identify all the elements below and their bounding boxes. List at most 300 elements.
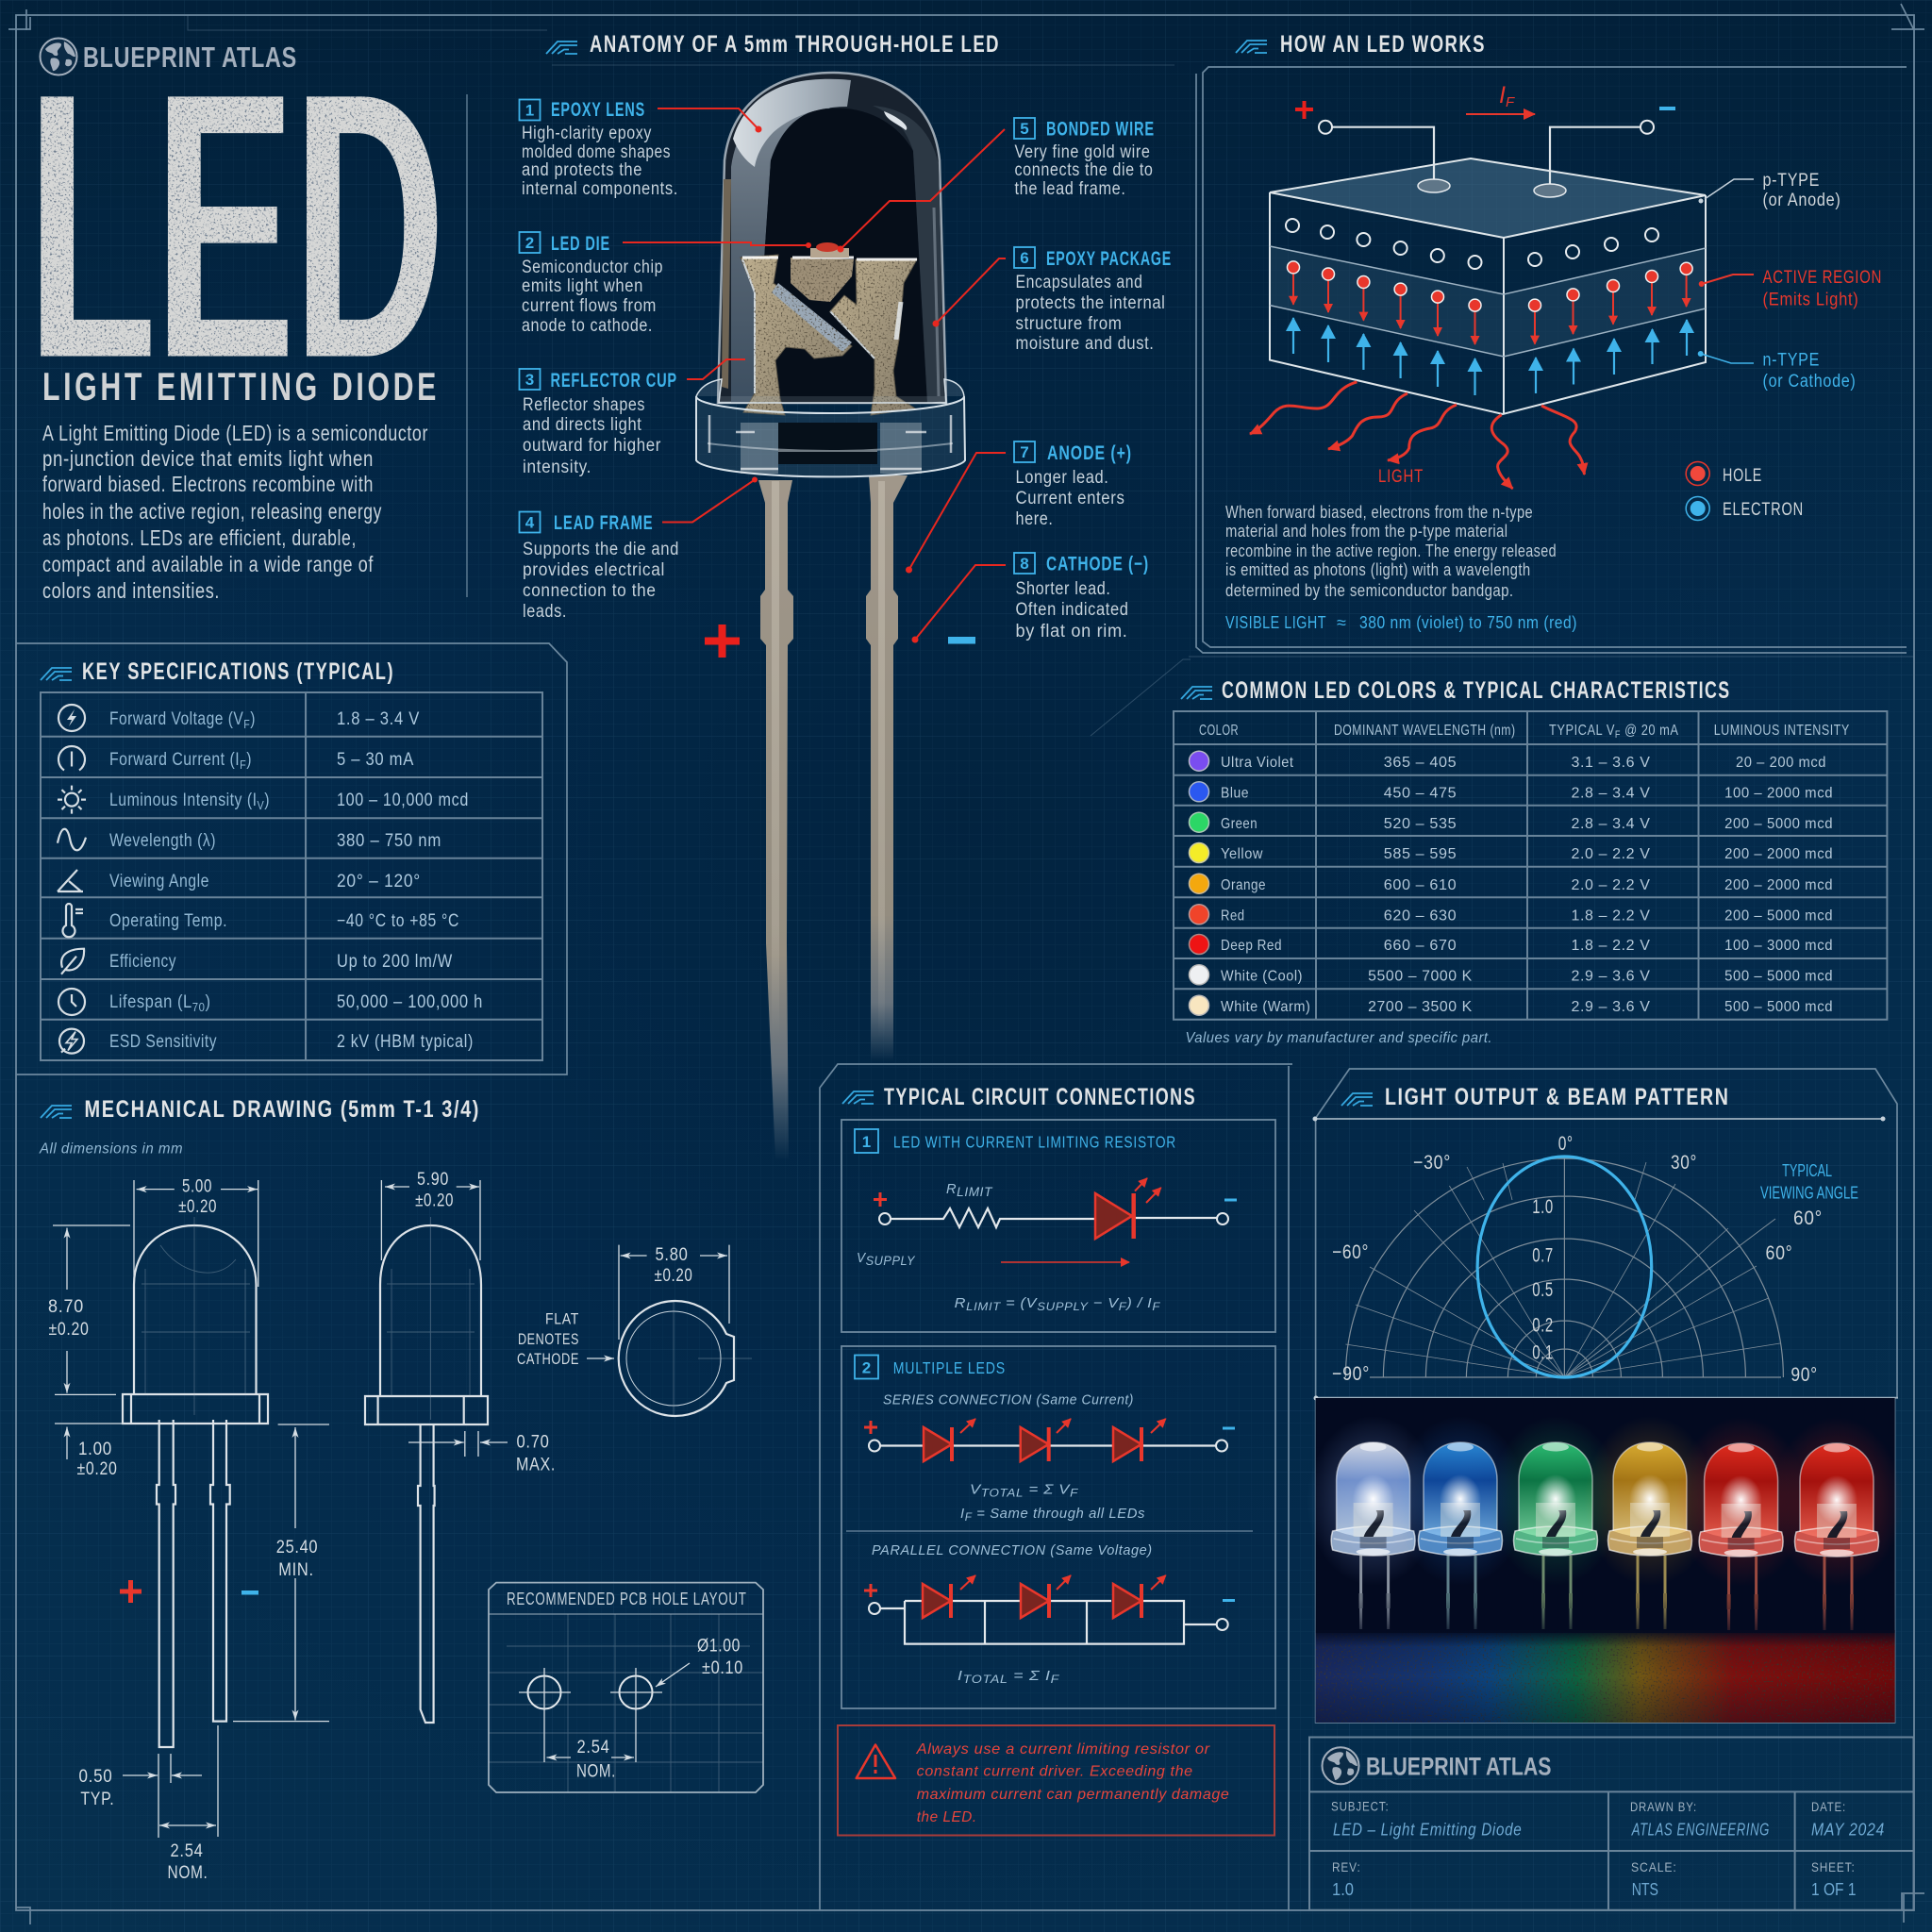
dimension: lead 0.70	[408, 1431, 556, 1475]
field: revision: 1.0	[1332, 1880, 1354, 1899]
heading: anatomy	[546, 31, 1000, 58]
callout 2: LED die: 2	[525, 234, 534, 252]
row: efficiency	[61, 949, 453, 974]
spec table grid	[41, 692, 542, 1060]
row: white warm: 2700 – 3500 K	[1368, 999, 1473, 1015]
polar labels: 90°	[1790, 1364, 1818, 1386]
dimension: width 5.00	[134, 1177, 258, 1287]
callout 4: lead frame: LEAD FRAME	[554, 512, 653, 534]
blue electron arrows	[1293, 318, 1687, 395]
callout 4: lead frame: provides electrical	[523, 560, 665, 580]
table header: LUMINOUS INTENSITY	[1714, 723, 1850, 739]
dimension: flange 1.00	[55, 1424, 123, 1479]
field: date	[1811, 1799, 1885, 1840]
semiconductor block	[1269, 158, 1706, 414]
dimension: lead length 25.40	[233, 1424, 329, 1722]
sub-panel 2: multiple LEDs: I	[960, 1506, 965, 1522]
callout 7: anode: Current enters	[1015, 489, 1124, 508]
row: wavelength: 380 – 750 nm	[337, 831, 441, 851]
row: lifespan: 70	[192, 1000, 205, 1014]
bottom view	[619, 1245, 752, 1416]
row: forward current: F	[240, 758, 246, 772]
LED: blue	[1394, 1416, 1526, 1629]
row: red	[1189, 905, 1833, 924]
callout 3: reflector cup: intensity.	[523, 458, 591, 477]
flat denotes cathode note	[517, 1310, 614, 1368]
callout 5: bonded wire: the lead frame.	[1015, 179, 1126, 199]
field: scale: SCALE:	[1631, 1859, 1677, 1874]
LED: red	[1675, 1417, 1807, 1630]
callout 3: reflector cup: 3	[525, 371, 534, 389]
dimension: height 8.70: ±0.20	[49, 1320, 89, 1340]
table header	[1199, 723, 1850, 741]
row: forward current	[58, 746, 414, 772]
terminals and contacts	[1295, 101, 1675, 197]
callout 1: epoxy lens	[519, 99, 762, 199]
intro text: compact and available in a wide range of	[42, 552, 374, 576]
row: luminous intensity: Luminous Intensity (I	[109, 791, 287, 810]
row: yellow: 200 – 2000 mcd	[1724, 846, 1833, 862]
heading: common LED colors: COMMON LED COLORS & TYPICAL CHARACTERISTICS	[1222, 677, 1731, 704]
callout 4: lead frame: connection to the	[523, 581, 657, 601]
row: efficiency: Up to 200 lm/W	[337, 952, 453, 972]
polar labels: −30°	[1413, 1152, 1451, 1174]
bottom view: ±0.20	[655, 1266, 692, 1286]
brand logo: Blueprint Atlas: BLUEPRINT ATLAS	[83, 41, 297, 74]
callout 4: lead frame: leads.	[523, 602, 567, 622]
callout 8: cathode: Shorter lead.	[1015, 579, 1111, 599]
how it works text: determined by the semiconductor bandgap.	[1225, 581, 1513, 600]
panel: PCB hole layout: 2.54	[577, 1738, 609, 1757]
callout 1: epoxy lens: 1	[525, 102, 534, 119]
sub-panel 2: multiple LEDs: I	[958, 1668, 962, 1684]
dimension: pitch 2.54	[159, 1725, 218, 1883]
field: sheet: 1 OF 1	[1811, 1880, 1857, 1899]
heading: how an LED works: HOW AN LED WORKS	[1280, 31, 1486, 58]
row: lifespan: Lifespan (L	[109, 992, 205, 1012]
row: deep red: Deep Red	[1221, 938, 1282, 954]
row: ultra violet: Ultra Violet	[1221, 755, 1294, 771]
flat denotes cathode note: DENOTES	[518, 1330, 579, 1348]
legend	[1686, 462, 1804, 521]
units note: All dimensions in mm	[39, 1141, 183, 1157]
layer labels: (or Cathode)	[1762, 372, 1857, 391]
callout 1: epoxy lens: internal components.	[522, 179, 678, 199]
sub-panel 2: multiple LEDs: F	[965, 1510, 973, 1524]
field: scale	[1631, 1859, 1677, 1899]
callout 5: bonded wire: BONDED WIRE	[1046, 119, 1155, 140]
intro text: A Light Emitting Diode (LED) is a semiconductor	[42, 421, 428, 445]
LED die	[810, 248, 849, 258]
panel: light output and beam pattern	[1307, 1069, 1903, 1723]
panel: how an LED works	[1196, 67, 1907, 653]
polar labels: 0.5	[1532, 1279, 1554, 1301]
row: orange	[1189, 874, 1833, 893]
polar labels: 0°	[1558, 1133, 1574, 1155]
row: white cool	[1189, 965, 1833, 985]
callout 1: epoxy lens: molded dome shapes	[522, 142, 671, 162]
row: forward current: Forward Current (I	[109, 750, 266, 770]
row: ESD sensitivity: 2 kV (HBM typical)	[337, 1032, 474, 1052]
row: white cool: 5500 – 7000 K	[1368, 968, 1473, 985]
callout 7: anode: here.	[1015, 509, 1053, 529]
warning callout: constant current driver. Exceeding the	[917, 1764, 1193, 1779]
row: forward current: 5 – 30 mA	[337, 750, 414, 770]
row: forward voltage: )	[250, 709, 256, 729]
row: ESD sensitivity	[59, 1029, 474, 1054]
dimension: pitch 2.54: 2.54	[170, 1841, 204, 1861]
anode lead	[758, 480, 793, 1160]
polar chart	[1332, 1133, 1858, 1386]
layer labels: p-TYPE	[1762, 171, 1820, 191]
dimension: lead 0.70: MAX.	[516, 1456, 556, 1475]
row: white warm	[1189, 995, 1833, 1015]
sub-panel 2: multiple LEDs	[841, 1346, 1275, 1708]
sub-panel 1: current limiting resistor: − V	[1089, 1295, 1120, 1311]
dimension: lead 0.50: TYP.	[80, 1790, 114, 1809]
LED: cool white	[1307, 1416, 1440, 1629]
callout 4: lead frame	[519, 477, 758, 622]
legend: HOLE	[1723, 466, 1762, 486]
callout 4: lead frame: 4	[525, 513, 535, 532]
sub-panel 1: current limiting resistor: F	[1152, 1300, 1160, 1313]
row: red: 620 – 630	[1384, 908, 1457, 924]
field: drawn by: ATLAS ENGINEERING	[1631, 1821, 1770, 1840]
dimension: height 8.70	[48, 1225, 130, 1394]
callout 6: epoxy package: structure from	[1015, 314, 1123, 334]
polar labels: 60°	[1766, 1242, 1792, 1264]
row: luminous intensity: 100 – 10,000 mcd	[337, 791, 469, 810]
brand logo: Blueprint Atlas	[40, 38, 297, 75]
field: revision	[1332, 1859, 1361, 1899]
heading	[842, 1084, 1196, 1110]
field: subject: SUBJECT:	[1331, 1799, 1389, 1814]
LED: deep red	[1771, 1417, 1903, 1630]
row: wavelength: Wevelength (λ)	[109, 831, 216, 851]
row: white cool: 2.9 – 3.6 V	[1572, 968, 1651, 985]
polar labels: 0.1	[1532, 1342, 1554, 1364]
table header: F	[1615, 729, 1621, 741]
layer labels: ACTIVE REGION	[1762, 268, 1882, 288]
parallel circuit	[864, 1575, 1235, 1644]
row: green: 2.8 – 3.4 V	[1572, 816, 1651, 832]
layer labels: n-TYPE	[1762, 350, 1820, 370]
row: operating temperature	[62, 904, 459, 937]
sub-panel 1: current limiting resistor: ) / I	[1124, 1295, 1152, 1311]
sub-panel 2: multiple LEDs: = Same through all LEDs	[973, 1506, 1145, 1522]
legend: ELECTRON	[1723, 500, 1804, 520]
field: revision: REV:	[1332, 1859, 1361, 1874]
photo: row of lit LEDs	[1307, 1398, 1903, 1723]
row: forward voltage	[58, 705, 420, 731]
row: white warm: 2.9 – 3.6 V	[1572, 999, 1651, 1015]
sub-panel 2: multiple LEDs: SERIES CONNECTION (Same Current)	[883, 1392, 1134, 1408]
field: sheet: SHEET:	[1811, 1859, 1856, 1874]
how it works text	[1225, 503, 1557, 600]
polar labels: −90°	[1332, 1363, 1370, 1385]
polarity marks	[705, 625, 975, 658]
dimension: flange 1.00: 1.00	[78, 1440, 112, 1459]
field: scale: NTS	[1632, 1880, 1658, 1899]
row: deep red	[1189, 934, 1833, 955]
red recombination markers	[1293, 274, 1687, 344]
callout 3: reflector cup: and directs light	[523, 415, 642, 435]
row: deep red: 100 – 3000 mcd	[1724, 938, 1833, 954]
callout 3: reflector cup: Reflector shapes	[523, 395, 645, 415]
how it works text: material and holes from the p-type material	[1225, 522, 1507, 541]
sub-panel 2: multiple LEDs: TOTAL	[981, 1487, 1024, 1500]
sub-panel 2: multiple LEDs: F	[1070, 1487, 1078, 1500]
heading: how an LED works	[1236, 31, 1486, 58]
cathode lead	[866, 475, 908, 1061]
row: blue: 100 – 2000 mcd	[1724, 785, 1833, 802]
dimension: lead length 25.40: MIN.	[278, 1560, 314, 1580]
callout 7: anode	[906, 441, 1132, 574]
beam lobe	[1477, 1157, 1652, 1377]
row: viewing angle	[58, 870, 421, 891]
row: red: Red	[1221, 908, 1245, 924]
callout 2: LED die	[519, 232, 811, 336]
callout 7: anode: Longer lead.	[1015, 468, 1109, 488]
sub-panel 1: current limiting resistor: 1	[862, 1133, 871, 1151]
callout 3: reflector cup	[519, 359, 745, 477]
callout 6: epoxy package: EPOXY PACKAGE	[1046, 248, 1172, 270]
row: deep red: 660 – 670	[1384, 938, 1457, 954]
heading: anatomy: ANATOMY OF A 5mm THROUGH-HOLE LED	[590, 31, 1000, 58]
dimension: flange 1.00: ±0.20	[77, 1459, 117, 1479]
dimension: lead 0.50: 0.50	[79, 1767, 113, 1787]
panel: key specifications	[16, 643, 567, 1074]
callout 1: epoxy lens: High-clarity epoxy	[522, 124, 652, 143]
callout 5: bonded wire: 5	[1020, 120, 1029, 138]
callout 6: epoxy package: protects the internal	[1015, 293, 1166, 313]
row: orange: 600 – 610	[1384, 877, 1457, 893]
lead frame and cup	[741, 255, 917, 415]
sub-panel 2: multiple LEDs: PARALLEL CONNECTION (Same Voltage)	[872, 1542, 1153, 1558]
visible light range: 380 nm (violet) to 750 nm (red)	[1359, 613, 1577, 632]
how it works text: When forward biased, electrons from the n-type	[1225, 503, 1533, 522]
callout 5: bonded wire	[838, 118, 1155, 253]
row: red: 1.8 – 2.2 V	[1572, 908, 1651, 924]
sub-panel 2: multiple LEDs: V	[970, 1481, 980, 1498]
sub-panel 2: multiple LEDs: 2	[862, 1358, 871, 1377]
row: viewing angle: 20° – 120°	[337, 872, 421, 891]
row: blue: Blue	[1221, 785, 1249, 802]
field: drawn by: DRAWN BY:	[1630, 1799, 1697, 1814]
warning callout: maximum current can permanently damage	[917, 1787, 1229, 1803]
flat denotes cathode note: CATHODE	[517, 1350, 579, 1368]
intro text: forward biased. Electrons recombine with	[42, 472, 374, 496]
intro text: as photons. LEDs are efficient, durable,	[42, 525, 357, 550]
brand logo: BLUEPRINT ATLAS	[1366, 1753, 1551, 1781]
series circuit	[864, 1419, 1235, 1461]
panel: typical circuit connections	[820, 1064, 1292, 1910]
row: white cool: White (Cool)	[1221, 968, 1303, 985]
sub-panel 2: multiple LEDs: F	[1051, 1673, 1059, 1686]
side view	[365, 1217, 488, 1723]
polar labels: 0.2	[1532, 1315, 1554, 1337]
sub-panel 2: multiple LEDs: = Σ I	[1008, 1668, 1051, 1684]
sub-panel 1: current limiting resistor: V	[857, 1250, 867, 1266]
row: forward voltage: Forward Voltage (V	[109, 709, 273, 729]
field: sheet	[1811, 1859, 1857, 1899]
visible light range: ≈	[1337, 613, 1346, 632]
row: lifespan: )	[205, 992, 211, 1012]
polar labels: 30°	[1671, 1152, 1697, 1174]
dimension: height 8.70: 8.70	[48, 1297, 84, 1317]
row: white warm: 500 – 5000 mcd	[1724, 999, 1833, 1015]
sub-panel 2: multiple LEDs: MULTIPLE LEDS	[893, 1358, 1006, 1377]
heading	[41, 658, 394, 685]
table header: COLOR	[1199, 723, 1239, 739]
LED: amber	[1584, 1416, 1716, 1629]
how it works text: recombine in the active region. The energy released	[1225, 541, 1557, 560]
panel: mechanical drawing	[39, 1096, 763, 1883]
warning callout: the LED.	[917, 1809, 977, 1825]
row: ultra violet: 20 – 200 mcd	[1736, 755, 1826, 771]
row: yellow	[1189, 843, 1833, 862]
field: subject: LED – Light Emitting Diode	[1333, 1821, 1522, 1840]
row: forward voltage: 1.8 – 3.4 V	[337, 709, 420, 729]
sub-panel 2: multiple LEDs: TOTAL	[963, 1673, 1008, 1686]
dimension: lead 0.50	[79, 1754, 202, 1838]
table header: @ 20 mA	[1621, 723, 1679, 739]
polarity marks	[120, 1580, 258, 1603]
callout 8: cathode: by flat on rim.	[1015, 622, 1128, 641]
dimension: width 5.00: ±0.20	[178, 1197, 217, 1217]
callout 6: epoxy package: Encapsulates and	[1015, 273, 1143, 292]
bottom view: 5.80	[655, 1245, 689, 1265]
viewing angle label: TYPICAL	[1782, 1161, 1832, 1180]
row: ultra violet: 365 – 405	[1384, 755, 1457, 771]
row: deep red: 1.8 – 2.2 V	[1572, 938, 1651, 954]
field: date: MAY 2024	[1811, 1821, 1885, 1840]
forward current label: I	[1499, 82, 1506, 108]
viewing angle label	[1760, 1161, 1858, 1203]
polar labels: 1.0	[1532, 1196, 1554, 1218]
visible light range	[1225, 613, 1577, 632]
row: viewing angle: Viewing Angle	[109, 872, 209, 891]
callout 6: epoxy package: moisture and dust.	[1015, 334, 1155, 354]
intro text: colors and intensities.	[42, 578, 220, 603]
heading: MECHANICAL DRAWING (5mm T-1 3/4)	[85, 1096, 480, 1123]
callout 8: cathode: Often indicated	[1015, 600, 1128, 620]
row: luminous intensity	[58, 786, 469, 814]
viewing angle label: VIEWING ANGLE	[1760, 1184, 1858, 1203]
row: operating temperature: Operating Temp.	[109, 911, 227, 931]
how it works text: is emitted as photons (light) with a wavelength	[1225, 560, 1531, 579]
brand logo	[1323, 1747, 1551, 1784]
row: blue: 2.8 – 3.4 V	[1572, 785, 1651, 802]
heading: LIGHT OUTPUT & BEAM PATTERN	[1385, 1084, 1730, 1110]
front view	[123, 1217, 268, 1747]
row: green: 200 – 5000 mcd	[1724, 816, 1833, 832]
polar labels: 60°	[1793, 1208, 1823, 1229]
dimension: lead 0.70: 0.70	[517, 1432, 549, 1453]
title block	[1309, 1738, 1913, 1910]
sub-panel 1: current limiting resistor	[841, 1120, 1275, 1332]
callout 7: anode: 7	[1020, 443, 1029, 461]
heading: KEY SPECIFICATIONS (TYPICAL)	[82, 658, 394, 685]
dimension: width 5.00: 5.00	[182, 1177, 212, 1196]
row: luminous intensity: )	[264, 791, 270, 810]
row: orange: 2.0 – 2.2 V	[1572, 877, 1651, 893]
sub-panel 1: current limiting resistor: = (V	[1001, 1295, 1039, 1311]
polar labels	[1332, 1133, 1823, 1386]
panel: PCB hole layout: NOM.	[576, 1762, 616, 1781]
subtitle: LIGHT EMITTING DIODE	[42, 364, 440, 408]
callout 1: epoxy lens: EPOXY LENS	[551, 99, 645, 121]
row: yellow: 585 – 595	[1384, 846, 1457, 862]
table header: TYPICAL V	[1549, 723, 1628, 739]
sub-panel 1: current limiting resistor: LED WITH CURRENT LIMITING RESISTOR	[893, 1132, 1176, 1151]
LED: green	[1490, 1416, 1622, 1629]
row: ultra violet	[1189, 751, 1826, 771]
callout 6: epoxy package	[932, 247, 1172, 354]
panel: PCB hole layout: RECOMMENDED PCB HOLE LAYOUT	[507, 1590, 747, 1608]
visible light range: VISIBLE LIGHT	[1225, 613, 1326, 632]
flat denotes cathode note: FLAT	[545, 1310, 579, 1328]
sub-panel 1: current limiting resistor: LIMIT	[957, 1184, 993, 1199]
intro text	[42, 421, 428, 603]
field: drawn by	[1630, 1799, 1770, 1840]
panel: PCB hole layout: ±0.10	[702, 1658, 743, 1678]
callout 5: bonded wire: connects the die to	[1015, 160, 1153, 180]
callout 2: LED die: LED DIE	[551, 233, 610, 255]
row: yellow: 2.0 – 2.2 V	[1572, 846, 1651, 862]
intro text: pn-junction device that emits light when	[42, 446, 374, 471]
dimension: width 5.90	[381, 1170, 480, 1260]
epoxy dome	[718, 73, 946, 403]
photo illustration: through-hole LED	[696, 73, 965, 1160]
row: green: 520 – 535	[1384, 816, 1457, 832]
row: ultra violet: 3.1 – 3.6 V	[1572, 755, 1651, 771]
forward current label: F	[1506, 94, 1515, 110]
row: red: 200 – 5000 mcd	[1724, 908, 1833, 924]
polar labels: 0.7	[1532, 1245, 1554, 1267]
callout 8: cathode: 8	[1020, 555, 1029, 573]
sub-panel 1: current limiting resistor: SUPPLY	[866, 1253, 916, 1268]
heading: common LED colors	[1181, 677, 1731, 704]
panel: PCB hole layout	[489, 1583, 763, 1792]
callout 3: reflector cup: REFLECTOR CUP	[551, 370, 677, 391]
table footnote: Values vary by manufacturer and specific part.	[1185, 1030, 1492, 1046]
row: lifespan: 50,000 – 100,000 h	[337, 992, 483, 1012]
row: lifespan	[58, 989, 483, 1015]
dimension: lead length 25.40: 25.40	[276, 1538, 318, 1557]
row: efficiency: Efficiency	[109, 952, 176, 972]
layer labels: (Emits Light)	[1762, 291, 1858, 310]
panel: PCB hole layout: Ø1.00	[697, 1636, 741, 1657]
dimension: width 5.90: ±0.20	[415, 1191, 454, 1211]
callout 5: bonded wire: Very fine gold wire	[1015, 142, 1151, 162]
row: wavelength	[58, 829, 441, 851]
dimension: width 5.90: 5.90	[417, 1170, 449, 1190]
callout 2: LED die: anode to cathode.	[522, 316, 653, 336]
callout 8: cathode: CATHODE (−)	[1046, 553, 1149, 575]
layer labels	[1698, 171, 1882, 391]
table header: DOMINANT WAVELENGTH (nm)	[1334, 723, 1515, 739]
sub-panel 2: multiple LEDs: = Σ V	[1024, 1481, 1072, 1498]
light rays	[1250, 382, 1585, 489]
polar labels: −60°	[1332, 1241, 1369, 1263]
sub-panel 1: current limiting resistor: SUPPLY	[1037, 1300, 1089, 1313]
light label: LIGHT	[1378, 467, 1424, 487]
row: forward current: )	[246, 750, 252, 770]
callout 3: reflector cup: outward for higher	[523, 436, 661, 456]
heading: TYPICAL CIRCUIT CONNECTIONS	[884, 1084, 1196, 1110]
callout 7: anode: ANODE (+)	[1047, 442, 1132, 464]
